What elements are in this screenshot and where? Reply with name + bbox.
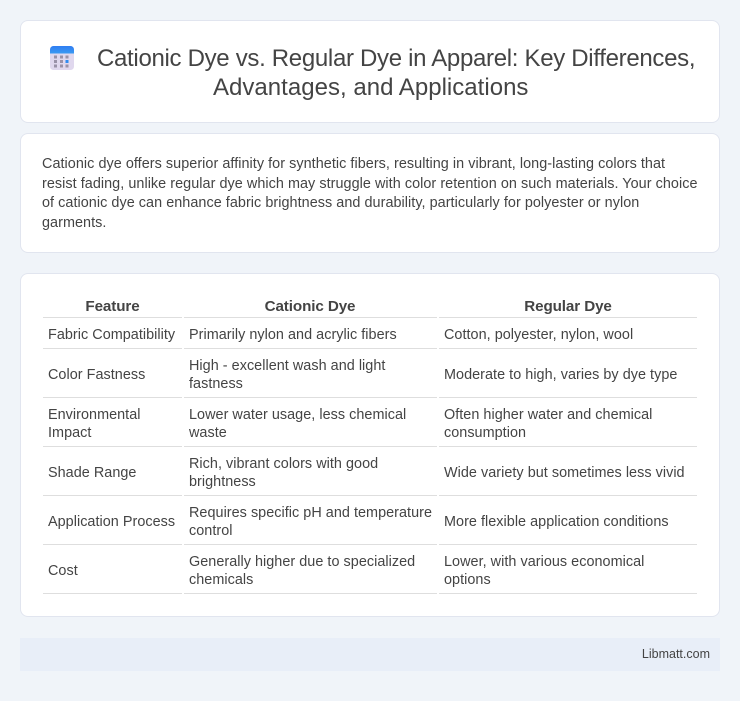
- table header: Cationic Dye: [265, 298, 355, 315]
- row: fabric compatibility: Fabric Compatibility: [48, 327, 175, 343]
- row: cost: [48, 554, 644, 588]
- title: Cationic Dye vs. Regular Dye in Apparel: Key Differences,: [97, 45, 695, 72]
- row: shade range: [48, 456, 685, 490]
- row: fabric compatibility: [48, 327, 633, 343]
- row: fabric compatibility: Cotton, polyester, nylon, wool: [444, 327, 633, 343]
- row: environmental impact: Lower water usage, less chemical: [189, 407, 406, 423]
- intro paragraph: Cationic dye offers superior affinity for synthetic fibers, resulting in vibrant, long-lasting colors that: [42, 156, 665, 172]
- icon: calendar: [50, 46, 74, 70]
- table header: [85, 298, 612, 315]
- footer text: Libmatt.com: [642, 647, 710, 661]
- row: shade range: Rich, vibrant colors with good: [189, 456, 378, 472]
- row: application process: control: [189, 523, 232, 539]
- row: cost: Cost: [48, 563, 78, 579]
- panel: header: [20, 20, 720, 123]
- row: fabric compatibility: Primarily nylon and acrylic fibers: [189, 327, 397, 343]
- row: cost: chemicals: [189, 572, 253, 588]
- row: cost: Lower, with various economical: [444, 554, 644, 570]
- table header: Regular Dye: [524, 298, 612, 315]
- row: color fastness: Color Fastness: [48, 367, 145, 383]
- row: shade range: brightness: [189, 474, 256, 490]
- row: color fastness: Moderate to high, varies by dye type: [444, 367, 677, 383]
- intro paragraph: garments.: [42, 215, 106, 231]
- row: application process: More flexible application conditions: [444, 514, 669, 530]
- title: [97, 45, 695, 101]
- intro paragraph: resist fading, unlike regular dye which may struggle with color retention on such materials. Your choice: [42, 176, 698, 192]
- row: color fastness: fastness: [189, 376, 243, 392]
- row: environmental impact: Environmental: [48, 407, 141, 423]
- row: cost: options: [444, 572, 491, 588]
- row: color fastness: [48, 358, 677, 392]
- row: application process: Application Process: [48, 514, 175, 530]
- intro paragraph: [42, 156, 698, 231]
- row: environmental impact: [48, 407, 652, 441]
- intro paragraph: of cationic dye can enhance fabric brightness and durability, particularly for polyester or nylon: [42, 195, 639, 211]
- row: shade range: Shade Range: [48, 465, 136, 481]
- row: color fastness: High - excellent wash and light: [189, 358, 385, 374]
- row: environmental impact: consumption: [444, 425, 526, 441]
- title: Advantages, and Applications: [213, 74, 528, 101]
- table header: Feature: [85, 298, 140, 315]
- row: application process: [48, 505, 669, 539]
- row: application process: Requires specific pH and temperature: [189, 505, 432, 521]
- footer bar: [20, 638, 720, 671]
- panel: comparison table: [20, 273, 720, 617]
- row: environmental impact: waste: [189, 425, 227, 441]
- row: cost: Generally higher due to specialized: [189, 554, 415, 570]
- row: shade range: Wide variety but sometimes less vivid: [444, 465, 685, 481]
- row: environmental impact: Impact: [48, 425, 91, 441]
- panel: intro text: [20, 133, 720, 253]
- row: environmental impact: Often higher water and chemical: [444, 407, 652, 423]
